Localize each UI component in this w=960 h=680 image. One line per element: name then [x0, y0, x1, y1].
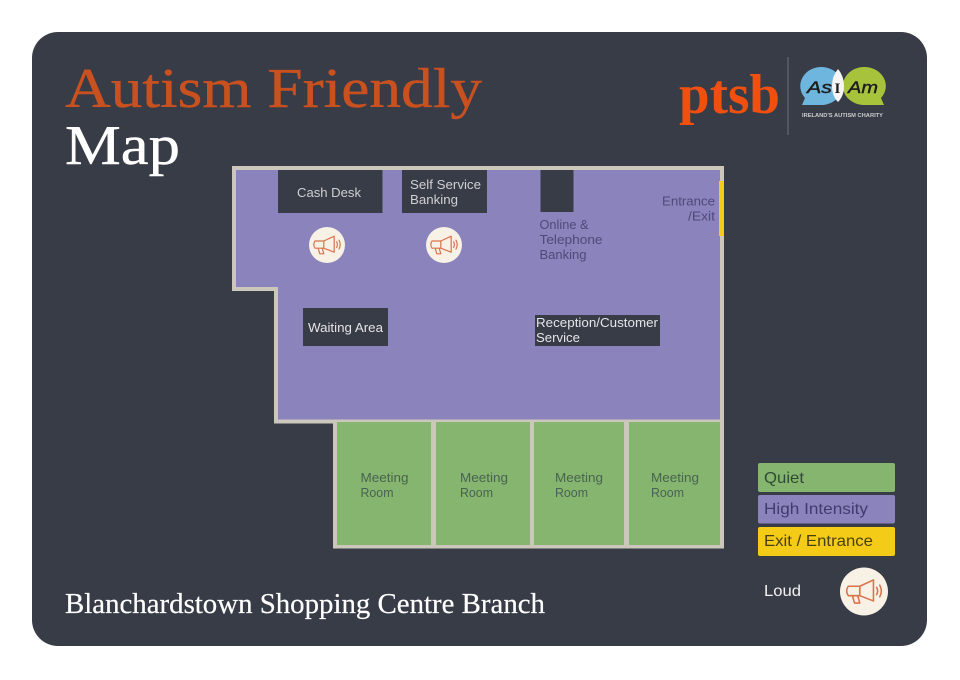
self service banking — [402, 170, 487, 213]
logo: As I Am charity: IRELAND'S AUTISM CHARITY — [802, 113, 884, 119]
meeting room labels: Meeting — [360, 470, 408, 485]
waiting area: Waiting Area — [308, 320, 384, 335]
meeting room labels: Room — [460, 485, 493, 500]
reception and customer service — [535, 315, 660, 346]
self service banking: Self Service — [410, 177, 481, 192]
entrance and exit label: /Exit — [688, 208, 715, 224]
online and telephone banking: Online & — [540, 217, 589, 232]
panel: high intensity floor area — [234, 168, 722, 422]
legend — [758, 463, 895, 616]
entrance and exit label: Entrance — [662, 194, 715, 208]
exit marker — [719, 181, 724, 236]
legend: exit and entrance: Exit / Entrance — [764, 533, 873, 550]
meeting room labels: Meeting — [555, 470, 603, 485]
title — [65, 58, 482, 177]
branch name: Blanchardstown Shopping Centre Branch — [65, 589, 545, 620]
legend: high intensity — [758, 495, 895, 524]
logo: ptsb: ptsb — [679, 64, 780, 126]
online and telephone banking — [540, 170, 602, 262]
legend: exit and entrance — [758, 527, 895, 556]
legend: loud — [764, 568, 888, 616]
icon: loud, self service — [426, 227, 462, 263]
legend: quiet — [758, 463, 895, 492]
logo: As I Am charity: Am — [847, 78, 878, 97]
title: Autism Friendly — [65, 58, 482, 120]
online and telephone banking: Telephone — [540, 232, 602, 247]
meeting room labels: Meeting — [651, 470, 699, 485]
meeting room labels: Room — [360, 485, 394, 500]
reception and customer service: Reception/Customer — [536, 315, 659, 330]
panel: meeting rooms block — [333, 420, 724, 548]
logo: As I Am charity: As — [806, 78, 833, 97]
waiting area — [303, 308, 388, 346]
entrance and exit label — [662, 194, 715, 224]
icon: loud, cash desk — [309, 227, 345, 263]
reception and customer service: Service — [536, 330, 580, 345]
legend: loud: Loud — [764, 583, 801, 600]
meeting room labels — [360, 470, 699, 500]
self service banking: Banking — [410, 192, 458, 207]
meeting room labels: Meeting — [460, 470, 508, 485]
title: Map — [65, 115, 180, 177]
meeting room labels: Room — [555, 485, 588, 500]
legend: high intensity: High Intensity — [764, 501, 868, 518]
meeting room labels: Room — [651, 485, 684, 500]
online and telephone banking: Banking — [540, 247, 586, 262]
legend: quiet: Quiet — [764, 470, 805, 487]
logo: As I Am charity: I — [834, 81, 840, 97]
logo: As I Am charity — [788, 57, 886, 135]
floor plan — [234, 168, 724, 548]
cash desk — [278, 170, 382, 213]
cash desk: Cash Desk — [297, 185, 362, 200]
